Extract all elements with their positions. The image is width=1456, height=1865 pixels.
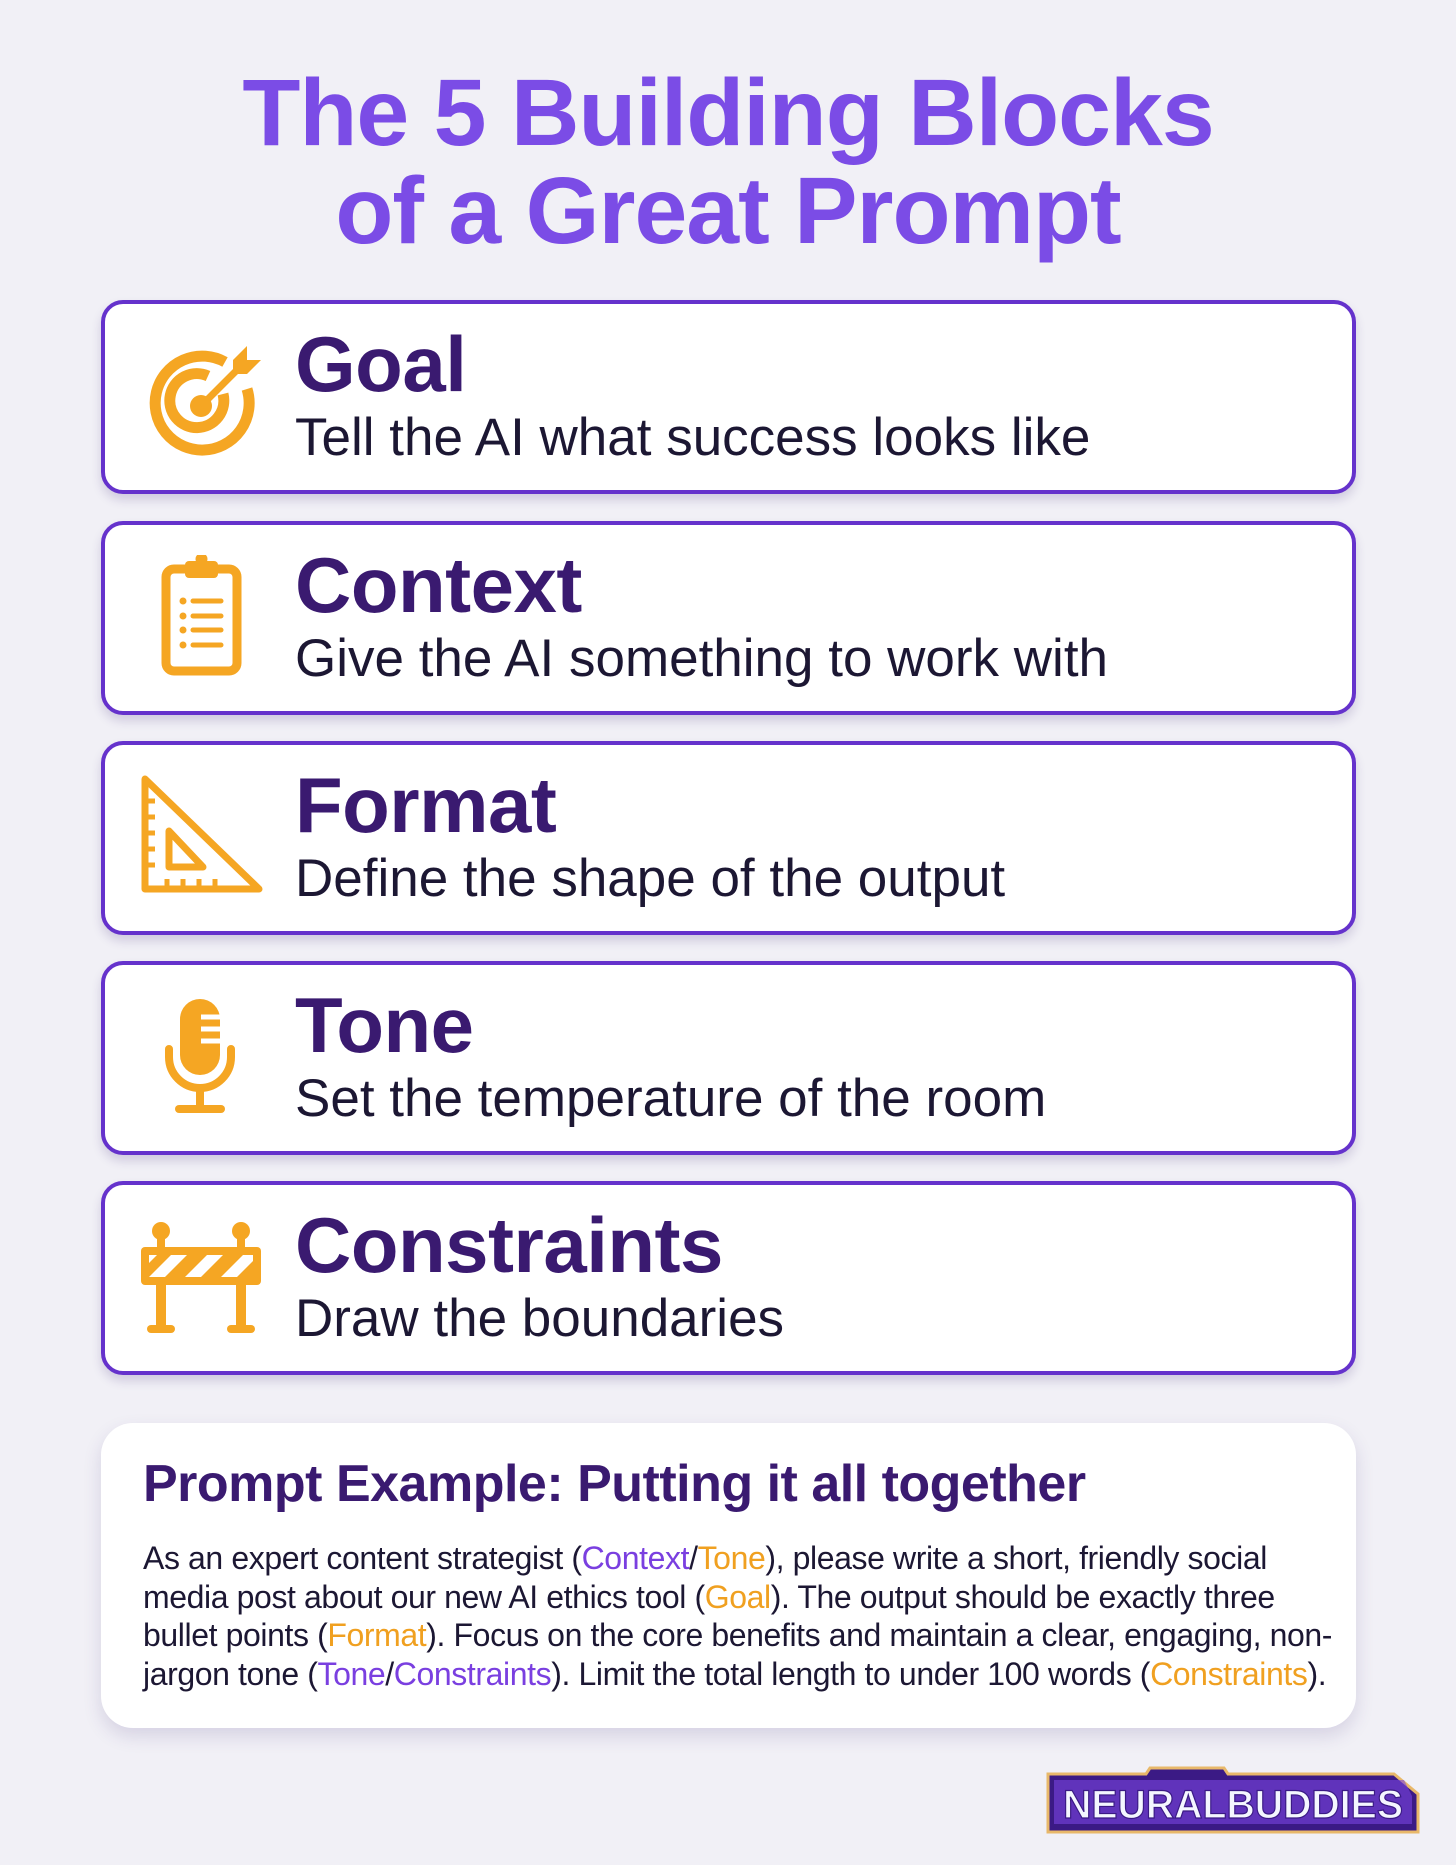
description: Give the AI something to work with	[295, 629, 1108, 688]
icon: set square	[142, 776, 262, 892]
icon: clipboard	[162, 555, 242, 676]
logo: NeuralBuddies: NEURALBUDDIES	[1063, 1783, 1403, 1827]
body text: bullet points (Format). Focus on the core benefits and maintain a clear, engaging, non-	[143, 1617, 1332, 1653]
title	[242, 60, 1214, 264]
body text: media post about our new AI ethics tool (Goal). The output should be exactly three	[143, 1578, 1275, 1614]
description: Define the shape of the output	[295, 849, 1005, 908]
heading: Goal	[295, 320, 466, 408]
card: context	[101, 521, 1356, 715]
icon: barrier	[141, 1222, 261, 1333]
icon: microphone	[165, 999, 235, 1113]
description: Draw the boundaries	[295, 1289, 784, 1348]
title: of a Great Prompt	[335, 158, 1121, 264]
heading: Context	[295, 541, 582, 629]
heading: Tone	[295, 981, 474, 1069]
card: constraints	[101, 1181, 1356, 1375]
body text: As an expert content strategist (Context/Tone), please write a short, friendly social	[143, 1540, 1267, 1576]
icon: target	[150, 346, 261, 456]
heading: Prompt Example: Putting it all together	[143, 1455, 1086, 1513]
heading: Format	[295, 761, 556, 849]
card: goal	[101, 300, 1356, 494]
title: The 5 Building Blocks	[242, 60, 1214, 166]
card: format	[101, 741, 1356, 935]
logo: NeuralBuddies	[1046, 1766, 1420, 1834]
card: tone	[101, 961, 1356, 1155]
panel: prompt example	[101, 1423, 1356, 1728]
body text	[142, 1540, 1332, 1692]
description: Tell the AI what success looks like	[295, 408, 1090, 467]
description: Set the temperature of the room	[295, 1069, 1046, 1128]
body text: jargon tone (Tone/Constraints). Limit the total length to under 100 words (Constraints).	[143, 1656, 1326, 1692]
heading: Constraints	[295, 1201, 723, 1289]
